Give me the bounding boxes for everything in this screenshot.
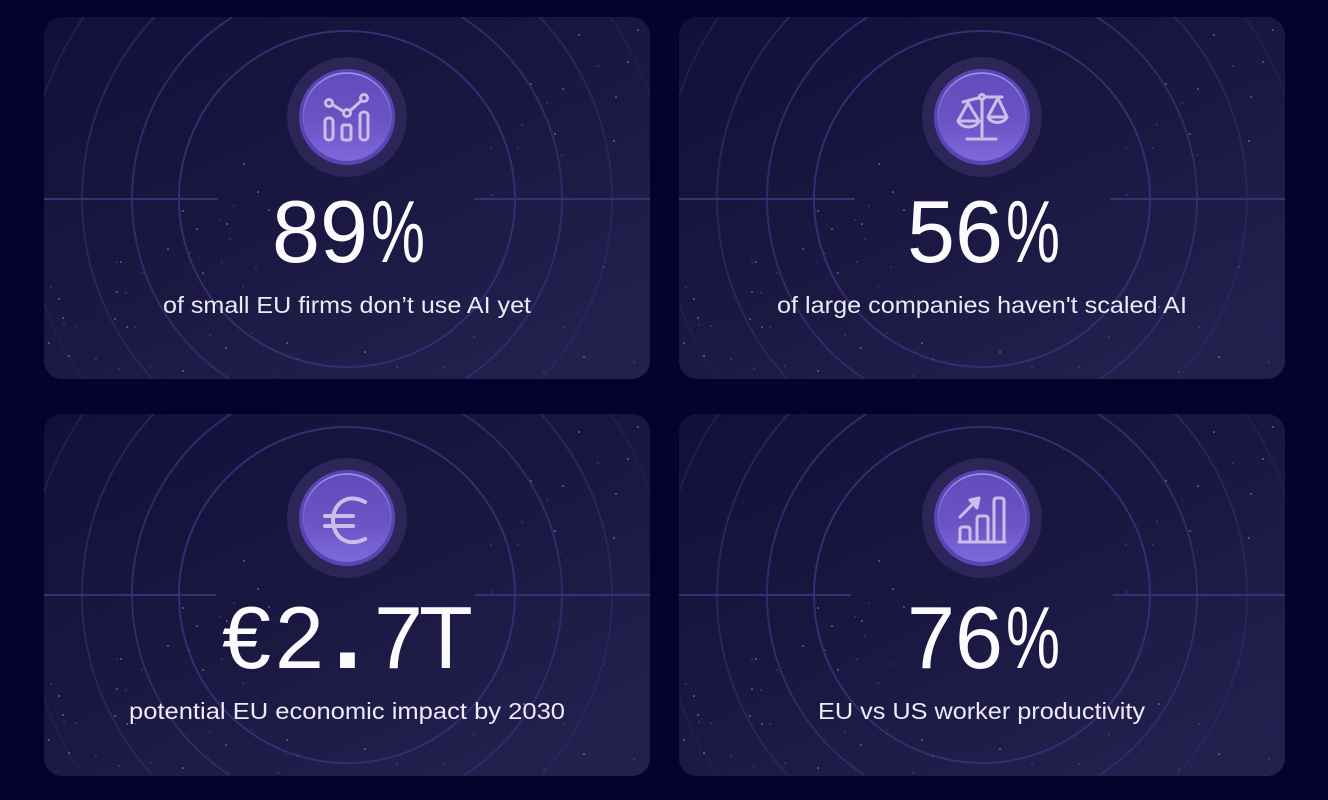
statistic: 89%: % (371, 182, 425, 281)
panel: 89% small EU firms (44, 17, 650, 379)
panel: 56% large companies (679, 17, 1285, 379)
icon: bar and line chart (287, 57, 407, 177)
label: large companies: of large companies haven't scaled AI (777, 292, 1187, 318)
panel: 76% worker productivity (679, 413, 1285, 776)
statistic: €2.7T: €2 (222, 588, 324, 687)
panel: €2.7T economic impact (44, 413, 650, 776)
concentric rings and stars (679, 413, 1285, 775)
statistic: €2.7T: . (333, 575, 362, 691)
statistic: 76%: % (1006, 588, 1060, 687)
label: economic impact: potential EU economic impact by 2030 (129, 698, 565, 724)
icon: balance scale (922, 57, 1042, 177)
label: worker productivity: EU vs US worker productivity (818, 698, 1146, 724)
label: small firms: of small EU firms don’t use AI yet (163, 292, 532, 318)
concentric rings and stars (44, 17, 650, 379)
statistic: €2.7T: 7T (374, 588, 473, 687)
statistic: 89%: 89 (272, 182, 368, 281)
concentric rings and stars (679, 17, 1285, 379)
statistic: 76%: 76 (907, 588, 1003, 687)
icon: growth bars with arrow (922, 458, 1042, 578)
statistic: 56%: 56 (907, 182, 1003, 281)
icon: euro sign (287, 458, 407, 578)
concentric rings and stars (44, 413, 650, 775)
statistic: 56%: % (1006, 182, 1060, 281)
